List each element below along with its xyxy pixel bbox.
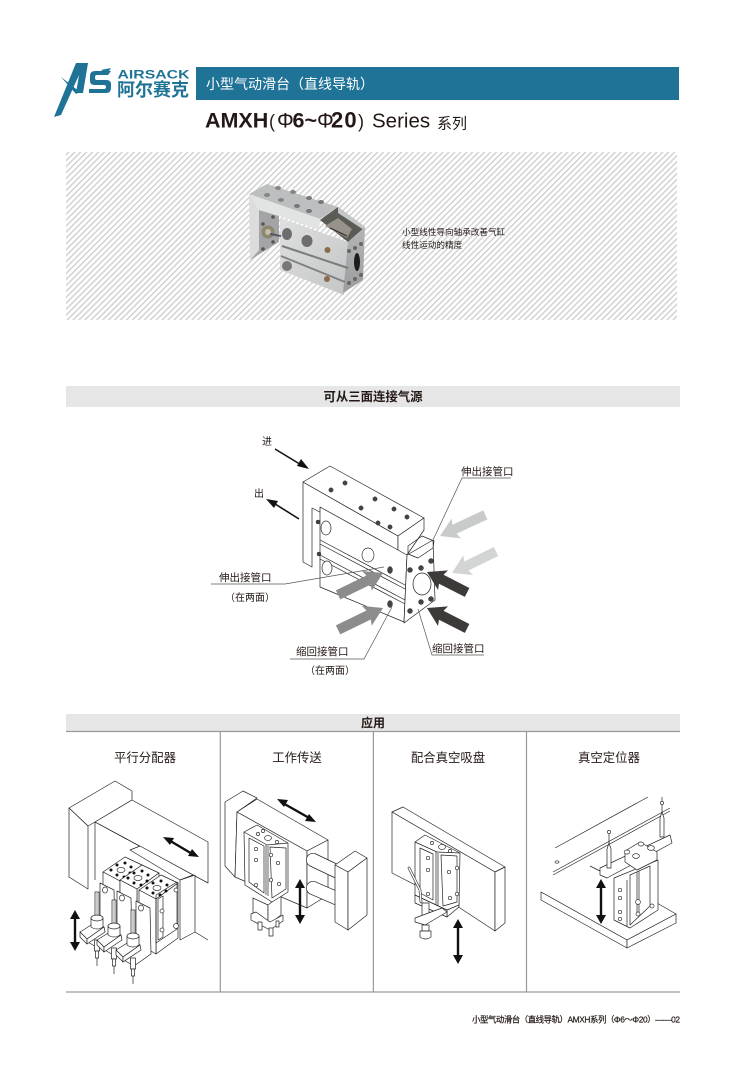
arrow: light grey lower <box>447 542 501 583</box>
footer page label: 小型气动滑台（直线导轨）AMXH系列（Φ6～Φ20）——02 <box>472 1014 680 1024</box>
series title: Φ <box>277 110 294 132</box>
application 4 drawing <box>541 797 676 948</box>
product description: 线性运动的精度 <box>402 239 463 250</box>
application 1: parallel distributor <box>69 751 208 984</box>
arrow: mid grey upper <box>333 563 388 605</box>
label: in: 进 <box>262 436 272 448</box>
label: out: 出 <box>254 487 264 500</box>
logo: Airsack <box>54 63 190 117</box>
application 4 title: 真空定位器 <box>578 750 641 765</box>
logo mark: AS <box>54 63 111 117</box>
callout: retract port bottom <box>290 607 392 677</box>
arrow: in <box>275 449 309 469</box>
logo text: English: AIRSACK <box>118 68 190 82</box>
header bar text: 小型气动滑台（直线导轨） <box>206 76 374 92</box>
heading text: 应用 <box>361 715 385 730</box>
product render <box>249 184 365 295</box>
heading text: 可从三面连接气源 <box>323 389 423 404</box>
callout: extend port left: （在两面） <box>225 592 275 604</box>
series title: ( <box>269 112 275 132</box>
motion arrow: vertical <box>70 910 80 951</box>
arrow: dark upper <box>422 562 472 602</box>
application 4: vacuum positioner <box>541 750 676 948</box>
application 1 title: 平行分配器 <box>114 751 177 765</box>
callout: extend port left: 伸出接管口 <box>219 571 272 584</box>
product description: 小型线性导向轴承改善气缸 <box>402 226 506 237</box>
header bar <box>196 67 679 100</box>
cylinder line drawing <box>303 466 435 623</box>
arrow: dark lower <box>422 598 472 638</box>
arrow: out <box>266 499 299 519</box>
logo text: Chinese: 阿尔赛克 <box>117 79 189 100</box>
series title: ) <box>358 112 364 132</box>
section heading bar: air connection <box>66 386 680 407</box>
arrow: light grey upper <box>435 505 490 546</box>
application 3 drawing <box>392 807 505 939</box>
series title: 6~ <box>292 108 317 132</box>
product description <box>402 226 506 250</box>
application 2 title: 工作传送 <box>272 750 322 765</box>
callout: retract port right <box>418 609 484 655</box>
series title: Series <box>372 110 430 132</box>
section heading bar: applications <box>66 714 680 731</box>
callout: retract port right: 缩回接管口 <box>432 642 484 655</box>
series title: Φ <box>317 110 334 132</box>
application 3: vacuum suction cup <box>392 750 505 964</box>
series title: 系列 <box>437 116 467 132</box>
motion arrow: horizontal <box>277 799 316 822</box>
series title: 20 <box>331 108 358 132</box>
arrow: mid grey lower <box>333 598 388 640</box>
motion arrow: vertical <box>295 879 305 924</box>
motion arrow: horizontal <box>163 837 199 857</box>
application 2 drawing <box>225 791 367 936</box>
application 1 drawing <box>69 781 208 984</box>
diagram: air port connection <box>211 436 514 677</box>
callout: retract port bottom: （在两面） <box>305 665 355 677</box>
panel: product photo with hatched background <box>66 152 677 320</box>
table grid <box>66 731 680 992</box>
motion arrow: vertical <box>453 919 463 964</box>
callout: extend port upper right <box>433 465 514 540</box>
panel: applications table <box>66 731 680 992</box>
series title: AMXH <box>205 108 268 132</box>
callout: extend port left <box>211 567 384 604</box>
callout: retract port bottom: 缩回接管口 <box>296 645 348 658</box>
callout: extend port upper right: 伸出接管口 <box>461 465 514 478</box>
application 3 title: 配合真空吸盘 <box>411 750 485 765</box>
motion arrow: vertical <box>596 879 606 924</box>
application 2: work transfer <box>225 750 367 936</box>
